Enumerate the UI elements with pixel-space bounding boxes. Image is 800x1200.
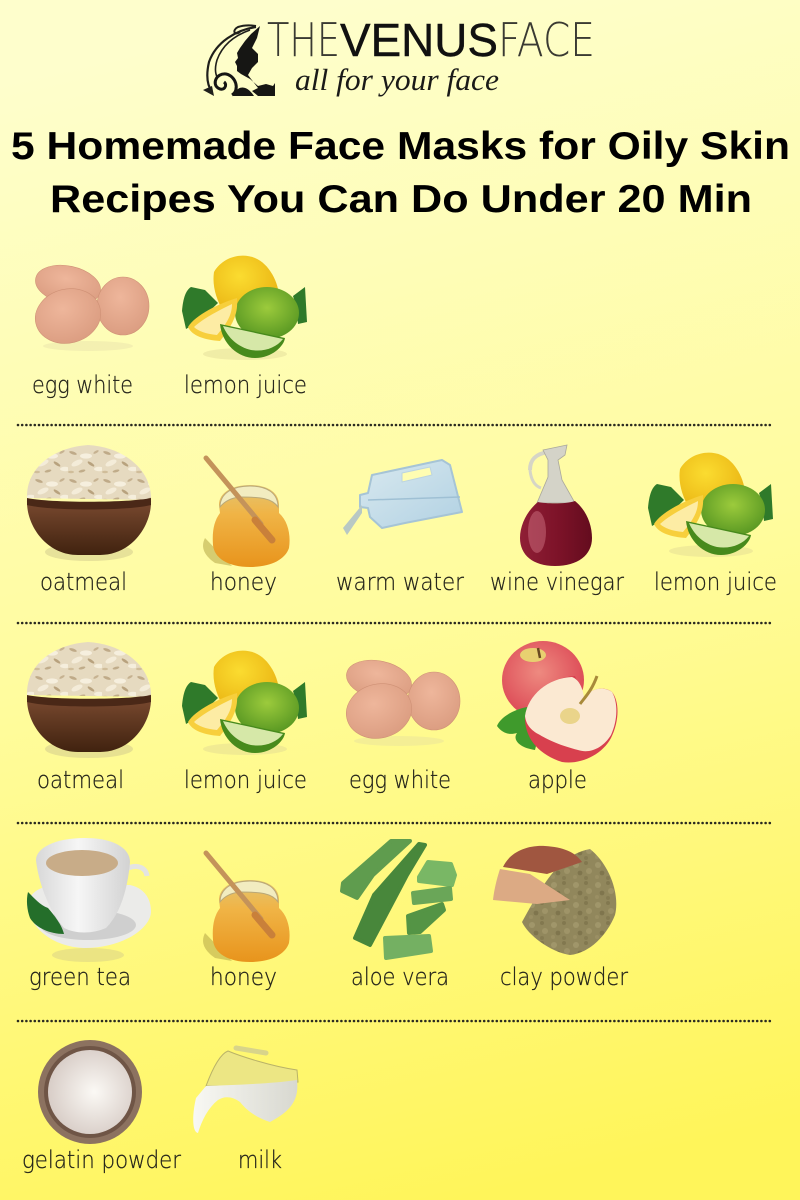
icon: eggs	[29, 260, 149, 351]
icon: lemon and lime	[182, 651, 307, 755]
panel: recipe 5	[22, 1040, 298, 1174]
label: oatmeal: oatmeal	[37, 766, 124, 794]
panel: recipe 2	[27, 445, 777, 596]
label: wine vinegar: wine vinegar	[490, 568, 624, 596]
icon: aloe vera	[342, 841, 455, 958]
icon: gelatin powder bowl	[38, 1040, 142, 1144]
icon: tea cup	[27, 838, 151, 962]
logo	[203, 13, 595, 97]
logo: wordmark: THE	[267, 13, 340, 67]
icon: lemon and lime	[182, 256, 307, 360]
icon: oatmeal bowl	[27, 445, 151, 561]
label: apple: apple	[528, 766, 587, 794]
icon: honey jar	[203, 458, 290, 567]
title: Recipes You Can Do Under 20 Min	[50, 178, 752, 221]
label: aloe vera: aloe vera	[351, 963, 449, 991]
label: oatmeal: oatmeal	[40, 568, 127, 596]
label: egg white: egg white	[349, 766, 451, 794]
panel: recipe 1	[29, 256, 307, 399]
icon: lemon and lime	[648, 453, 773, 557]
panel: recipe 4	[27, 838, 628, 991]
label: lemon juice: lemon juice	[654, 568, 777, 596]
label: honey: honey	[210, 963, 277, 991]
icon: water bottle	[343, 460, 462, 535]
icon: wine vinegar bottle	[520, 445, 592, 566]
icon: apple	[497, 641, 618, 763]
label: gelatin powder: gelatin powder	[22, 1146, 181, 1174]
label: lemon juice: lemon juice	[184, 766, 307, 794]
icon: clay powder	[493, 846, 616, 955]
label: warm water: warm water	[336, 568, 464, 596]
label: honey: honey	[210, 568, 277, 596]
logo: tagline: all for your face	[295, 62, 499, 97]
label: clay powder: clay powder	[500, 963, 628, 991]
title: 5 Homemade Face Masks for Oily Skin	[11, 125, 790, 168]
label: green tea: green tea	[29, 963, 131, 991]
panel: recipe 3	[27, 641, 618, 794]
logo: wordmark	[267, 13, 595, 67]
logo: wordmark: VENUS	[340, 14, 498, 66]
icon: honey jar	[203, 853, 290, 962]
title	[11, 125, 790, 221]
label: egg white: egg white	[32, 371, 133, 399]
logo: wordmark: FACE	[498, 13, 595, 67]
icon: oatmeal bowl	[27, 642, 151, 758]
icon: milk jug	[193, 1048, 298, 1133]
icon: eggs	[340, 655, 460, 746]
label: lemon juice: lemon juice	[184, 371, 307, 399]
label: milk: milk	[238, 1146, 282, 1174]
logo: face silhouette	[203, 25, 275, 96]
